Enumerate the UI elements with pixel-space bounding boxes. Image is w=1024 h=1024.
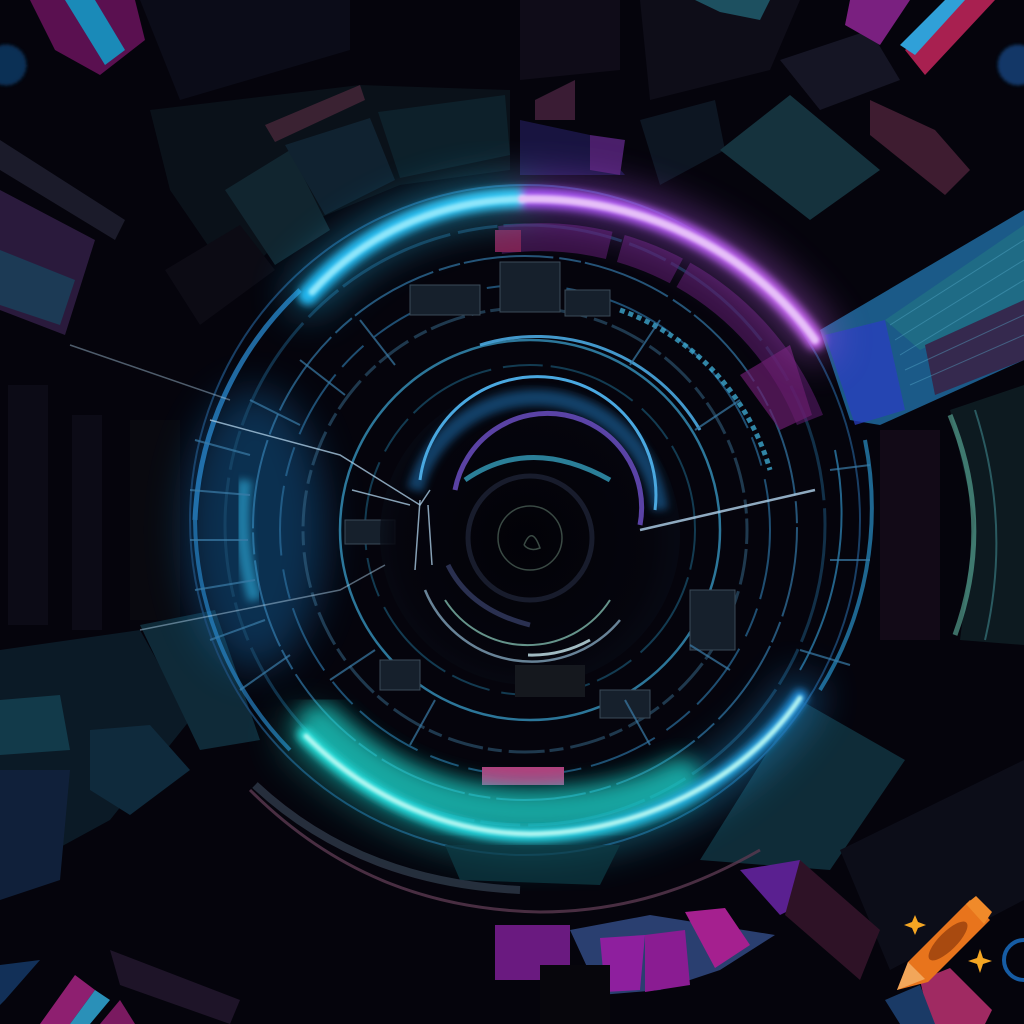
ring: radial tick segments bbox=[190, 320, 870, 745]
panel: left blue slab bbox=[0, 140, 275, 335]
small circuit blocks bbox=[482, 230, 812, 785]
neon arc: top cyan and purple bbox=[308, 198, 815, 340]
panel: bottom magenta blocks bbox=[0, 908, 775, 1024]
ring: circuit fragments upper bbox=[345, 262, 735, 718]
ring: concentric wireframe bbox=[190, 185, 872, 855]
ring: purple upper band bbox=[500, 237, 810, 420]
panel: left dark columns bbox=[8, 385, 180, 630]
panel: top corners neon bbox=[0, 0, 1024, 85]
crosshair lines bbox=[70, 345, 815, 630]
panel: upper ring machinery bbox=[140, 0, 970, 285]
hatching on the fan bbox=[890, 240, 1024, 385]
panel: lower right blocks bbox=[700, 700, 1024, 1024]
icon: corner ring bbox=[1004, 940, 1024, 980]
center disc bbox=[380, 385, 680, 685]
neon arc: bottom teal bbox=[305, 697, 800, 835]
lower outer ring bbox=[250, 785, 760, 912]
inner swirl rings bbox=[415, 377, 660, 662]
icon: crayon logo bbox=[897, 896, 992, 990]
panel: right blue fan bbox=[820, 210, 1024, 645]
blue glow: left of ring bbox=[185, 390, 325, 670]
panel: lower left blocks bbox=[0, 610, 260, 900]
